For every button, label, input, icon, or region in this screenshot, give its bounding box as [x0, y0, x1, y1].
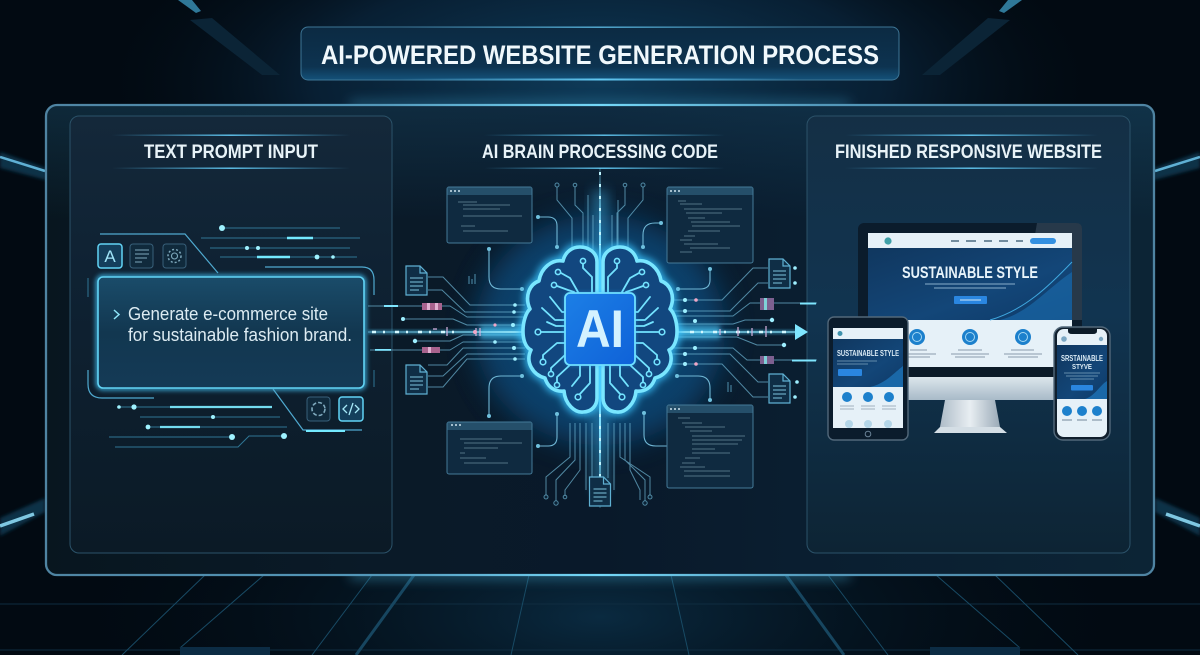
icon: document left lower [406, 365, 427, 394]
title banner: AI-POWERED WEBSITE GENERATION PROCESS [321, 40, 879, 70]
brain with AI chip [523, 247, 677, 412]
icon: gear [163, 244, 186, 268]
icon: letter A [98, 244, 122, 268]
elbow connectors [487, 215, 712, 448]
prompt text: for sustainable fashion brand. [128, 325, 352, 345]
smartphone [1054, 327, 1110, 440]
prompt text: Generate e-commerce site [128, 304, 328, 324]
monitor nav [884, 237, 1056, 245]
decorative circuit lines above prompt [100, 225, 374, 295]
heading: text prompt input: TEXT PROMPT INPUT [144, 142, 318, 163]
panel: AI brain processing code [368, 134, 817, 508]
prompt box [98, 277, 364, 388]
code window: top left [447, 187, 532, 243]
central flow and arrow [368, 324, 808, 340]
main glass panel [46, 101, 1154, 578]
top and bottom circuit traces [544, 183, 652, 505]
smartphone: STYVE [1072, 362, 1092, 371]
right data stream lines [670, 268, 817, 397]
tablet: SUSTAINABLE STYLE [837, 348, 899, 358]
icon: chat cycle [307, 397, 330, 421]
heading: AI brain processing code: AI BRAIN PROCESSING CODE [482, 142, 718, 163]
AI chip: AI [576, 300, 624, 359]
desktop monitor [858, 223, 1082, 433]
title banner [301, 26, 899, 80]
monitor feature icons [908, 329, 1042, 357]
icon: text document [130, 244, 153, 268]
code window: bottom left [447, 422, 532, 474]
AI chip [565, 293, 635, 365]
code window: bottom right [667, 405, 753, 488]
icon: document right lower [769, 374, 790, 403]
right hemisphere [603, 247, 677, 412]
code window: top right [667, 187, 753, 263]
heading: finished responsive website: FINISHED RESPONSIVE WEBSITE [835, 142, 1102, 163]
chevron prompt [114, 310, 119, 319]
tablet [828, 317, 908, 440]
data chips and glow dots [375, 266, 816, 399]
icon: code brackets [339, 397, 363, 421]
monitor hero: SUSTAINABLE STYLE [902, 264, 1038, 282]
panel: finished responsive website [828, 134, 1110, 440]
icon: letter A: A [104, 247, 116, 266]
decorative circuit lines below prompt [88, 278, 374, 447]
icon: document bottom [590, 477, 610, 506]
panel: text prompt input [70, 116, 392, 553]
monitor hero [868, 248, 1072, 320]
left hemisphere [523, 247, 597, 412]
icon: document right upper [769, 259, 790, 288]
arrow: flow to website [795, 324, 808, 340]
panel: finished responsive website background [807, 116, 1130, 553]
icon: document left upper [406, 266, 427, 295]
vertical data beam [592, 168, 608, 508]
left data stream lines [368, 277, 525, 387]
smartphone: SRSTAINABLE [1061, 354, 1103, 363]
